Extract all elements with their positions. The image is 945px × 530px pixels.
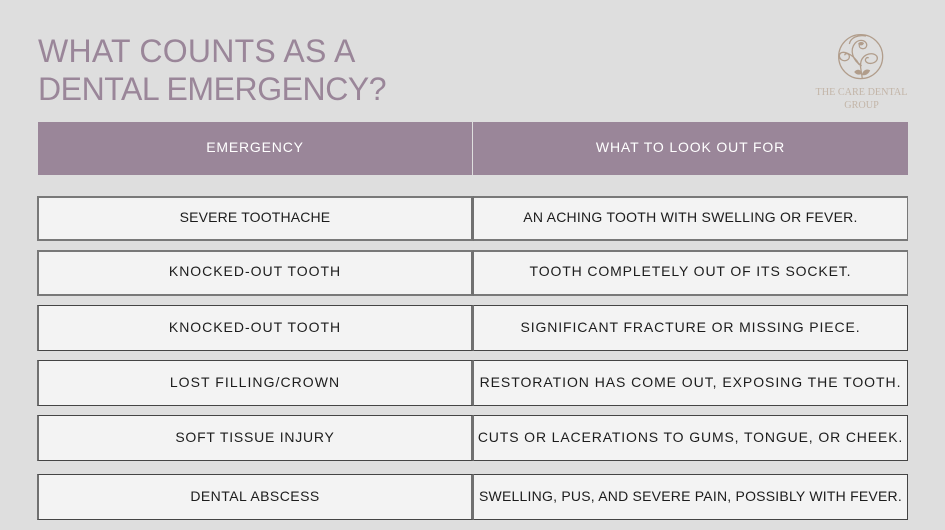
row 1 emergency (37, 196, 474, 241)
logo text: THE CARE DENTAL (816, 87, 908, 98)
row 2 emergency (37, 250, 474, 296)
row 3 description (474, 305, 908, 351)
title: DENTAL EMERGENCY? (38, 71, 386, 107)
row 5 emergency: SOFT TISSUE INJURY (175, 429, 335, 445)
row 5 description: CUTS OR LACERATIONS TO GUMS, TONGUE, OR CHEEK. (478, 429, 903, 445)
row 2 description (474, 250, 908, 296)
row 4 emergency (37, 360, 474, 406)
row 1 emergency: SEVERE TOOTHACHE (180, 209, 330, 225)
row 6 emergency (37, 474, 474, 520)
row 6 description: SWELLING, PUS, AND SEVERE PAIN, POSSIBLY WITH FEVER. (479, 488, 902, 504)
row 2 description: TOOTH COMPLETELY OUT OF ITS SOCKET. (530, 263, 851, 279)
logo text: GROUP (844, 100, 879, 111)
row 3 description: SIGNIFICANT FRACTURE OR MISSING PIECE. (520, 319, 861, 335)
row 4 description (474, 360, 908, 406)
row 2 emergency: KNOCKED-OUT TOOTH (169, 263, 341, 279)
row 4 description: RESTORATION HAS COME OUT, EXPOSING THE TOOTH. (480, 374, 901, 390)
row 3 emergency: KNOCKED-OUT TOOTH (169, 319, 341, 335)
table header: what to look out for (473, 122, 908, 175)
table header: what to look out for: WHAT TO LOOK OUT FOR (596, 139, 785, 155)
row 5 emergency (37, 415, 474, 461)
row 5 description (474, 415, 908, 461)
title: WHAT COUNTS AS A (38, 33, 356, 69)
table header: emergency: EMERGENCY (206, 139, 304, 155)
table header: emergency (38, 122, 472, 175)
row 6 description (474, 474, 908, 520)
logo: The Care Dental Group (816, 34, 908, 111)
row 1 description (474, 196, 908, 241)
row 6 emergency: DENTAL ABSCESS (190, 488, 320, 504)
row 4 emergency: LOST FILLING/CROWN (170, 374, 340, 390)
row 3 emergency (37, 305, 474, 351)
logo text (816, 87, 908, 111)
title (38, 33, 386, 107)
row 1 description: AN ACHING TOOTH WITH SWELLING OR FEVER. (523, 209, 858, 225)
icon: swirl emblem (838, 34, 884, 80)
